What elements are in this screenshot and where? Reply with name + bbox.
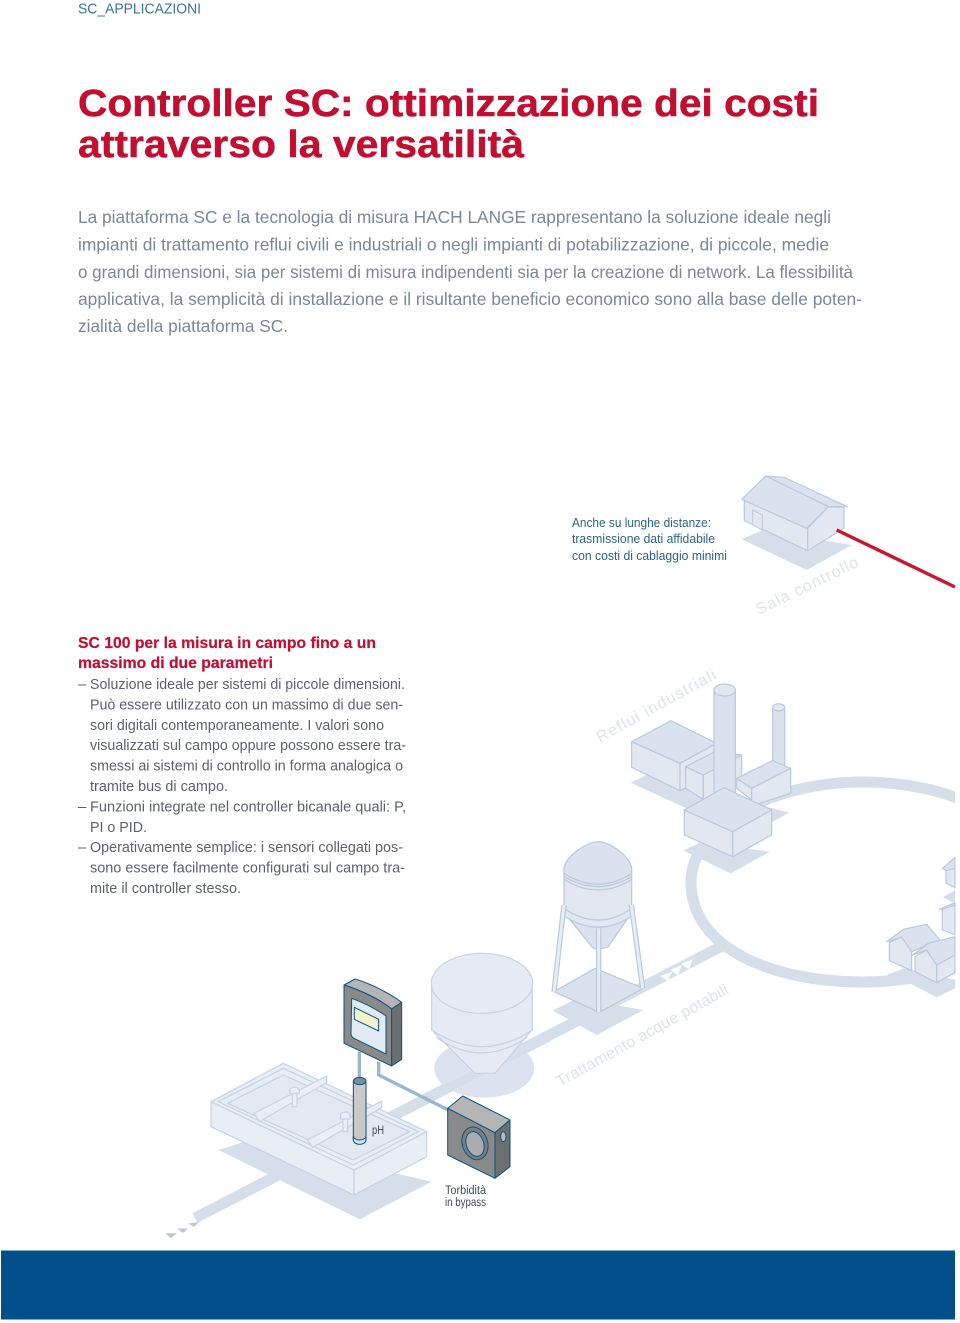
label: pH: pH	[372, 1125, 384, 1137]
settling basin	[211, 1063, 432, 1219]
SC 100 text block: mite il controller stesso.	[90, 880, 241, 897]
SC 100 text block: tramite bus di campo.	[90, 778, 228, 795]
SC 100 text block: SC 100 per la misura in campo fino a un	[78, 635, 376, 652]
callout: data transmission	[572, 516, 727, 563]
footer band	[1, 1250, 955, 1320]
title	[78, 83, 819, 166]
SC 100 text block: –	[78, 798, 87, 815]
SC 100 text block: Soluzione ideale per sistemi di piccole dimensioni.	[90, 676, 405, 693]
SC 100 text block: sono essere facilmente configurati sul campo tra-	[90, 860, 405, 877]
industrial plant	[631, 684, 791, 873]
section label: SC_APPLICAZIONI	[78, 2, 201, 18]
network ring and main pipe	[195, 782, 960, 1218]
SC 100 text block: massimo di due parametri	[78, 655, 273, 672]
intro paragraph: zialità della piattaforma SC.	[78, 316, 288, 336]
control room house	[742, 476, 852, 570]
sensor cables	[359, 1052, 448, 1110]
intro paragraph: La piattaforma SC e la tecnologia di misura HACH LANGE rappresentano la soluzione ideale negli	[78, 207, 831, 227]
controller unit	[344, 979, 402, 1066]
SC 100 text block: Funzioni integrate nel controller bicanale quali: P,	[90, 798, 406, 815]
callout: data transmission: trasmissione dati affidabile	[572, 532, 715, 546]
label: Sala controllo: Sala controllo	[753, 554, 862, 619]
intro paragraph: applicativa, la semplicità di installazione e il risultante beneficio economico sono alla base delle poten-	[78, 289, 862, 309]
water tower	[553, 842, 643, 1035]
settlement houses	[887, 857, 955, 997]
intro paragraph: impianti di trattamento reflui civili e industriali o negli impianti di potabilizzazione, di piccole, medie	[78, 234, 829, 254]
SC 100 text block: –	[78, 676, 87, 693]
SC 100 text block: Operativamente semplice: i sensori collegati pos-	[90, 839, 403, 856]
label: Torbidità in bypass: in bypass	[445, 1197, 486, 1209]
SC 100 text block: Può essere utilizzato con un massimo di due sen-	[90, 696, 403, 713]
conical tank	[390, 953, 550, 1115]
SC 100 text block: visualizzati sul campo oppure possono essere tra-	[90, 737, 406, 754]
SC 100 text block: sori digitali contemporaneamente. I valori sono	[90, 717, 384, 734]
flow arrows lower	[165, 1222, 199, 1238]
SC 100 text block	[78, 635, 406, 897]
SC 100 text block: PI o PID.	[90, 819, 147, 836]
intro paragraph	[78, 207, 862, 336]
label: Torbidità in bypass: Torbidità	[445, 1185, 487, 1197]
intro paragraph: o grandi dimensioni, sia per sistemi di misura indipendenti sia per la creazione di network. La flessibilità	[78, 262, 853, 282]
title: Controller SC: ottimizzazione dei costi	[78, 83, 819, 125]
callout: data transmission: con costi di cablaggio minimi	[572, 549, 727, 563]
red data cable	[837, 530, 955, 587]
label: Reflui industriali: Reflui industriali	[594, 667, 719, 746]
title: attraverso la versatilità	[78, 124, 525, 166]
callout: data transmission: Anche su lunghe distanze:	[572, 516, 711, 530]
SC 100 text block: –	[78, 839, 87, 856]
label: Trattamento acque potabili: Trattamento acque potabili	[554, 982, 732, 1090]
pH probe	[353, 1077, 366, 1144]
label: Torbidità in bypass	[445, 1185, 487, 1209]
SC 100 text block: smessi ai sistemi di controllo in forma analogica o	[90, 758, 403, 775]
turbidity sensor	[448, 1096, 510, 1178]
flow arrows upper	[660, 959, 693, 981]
